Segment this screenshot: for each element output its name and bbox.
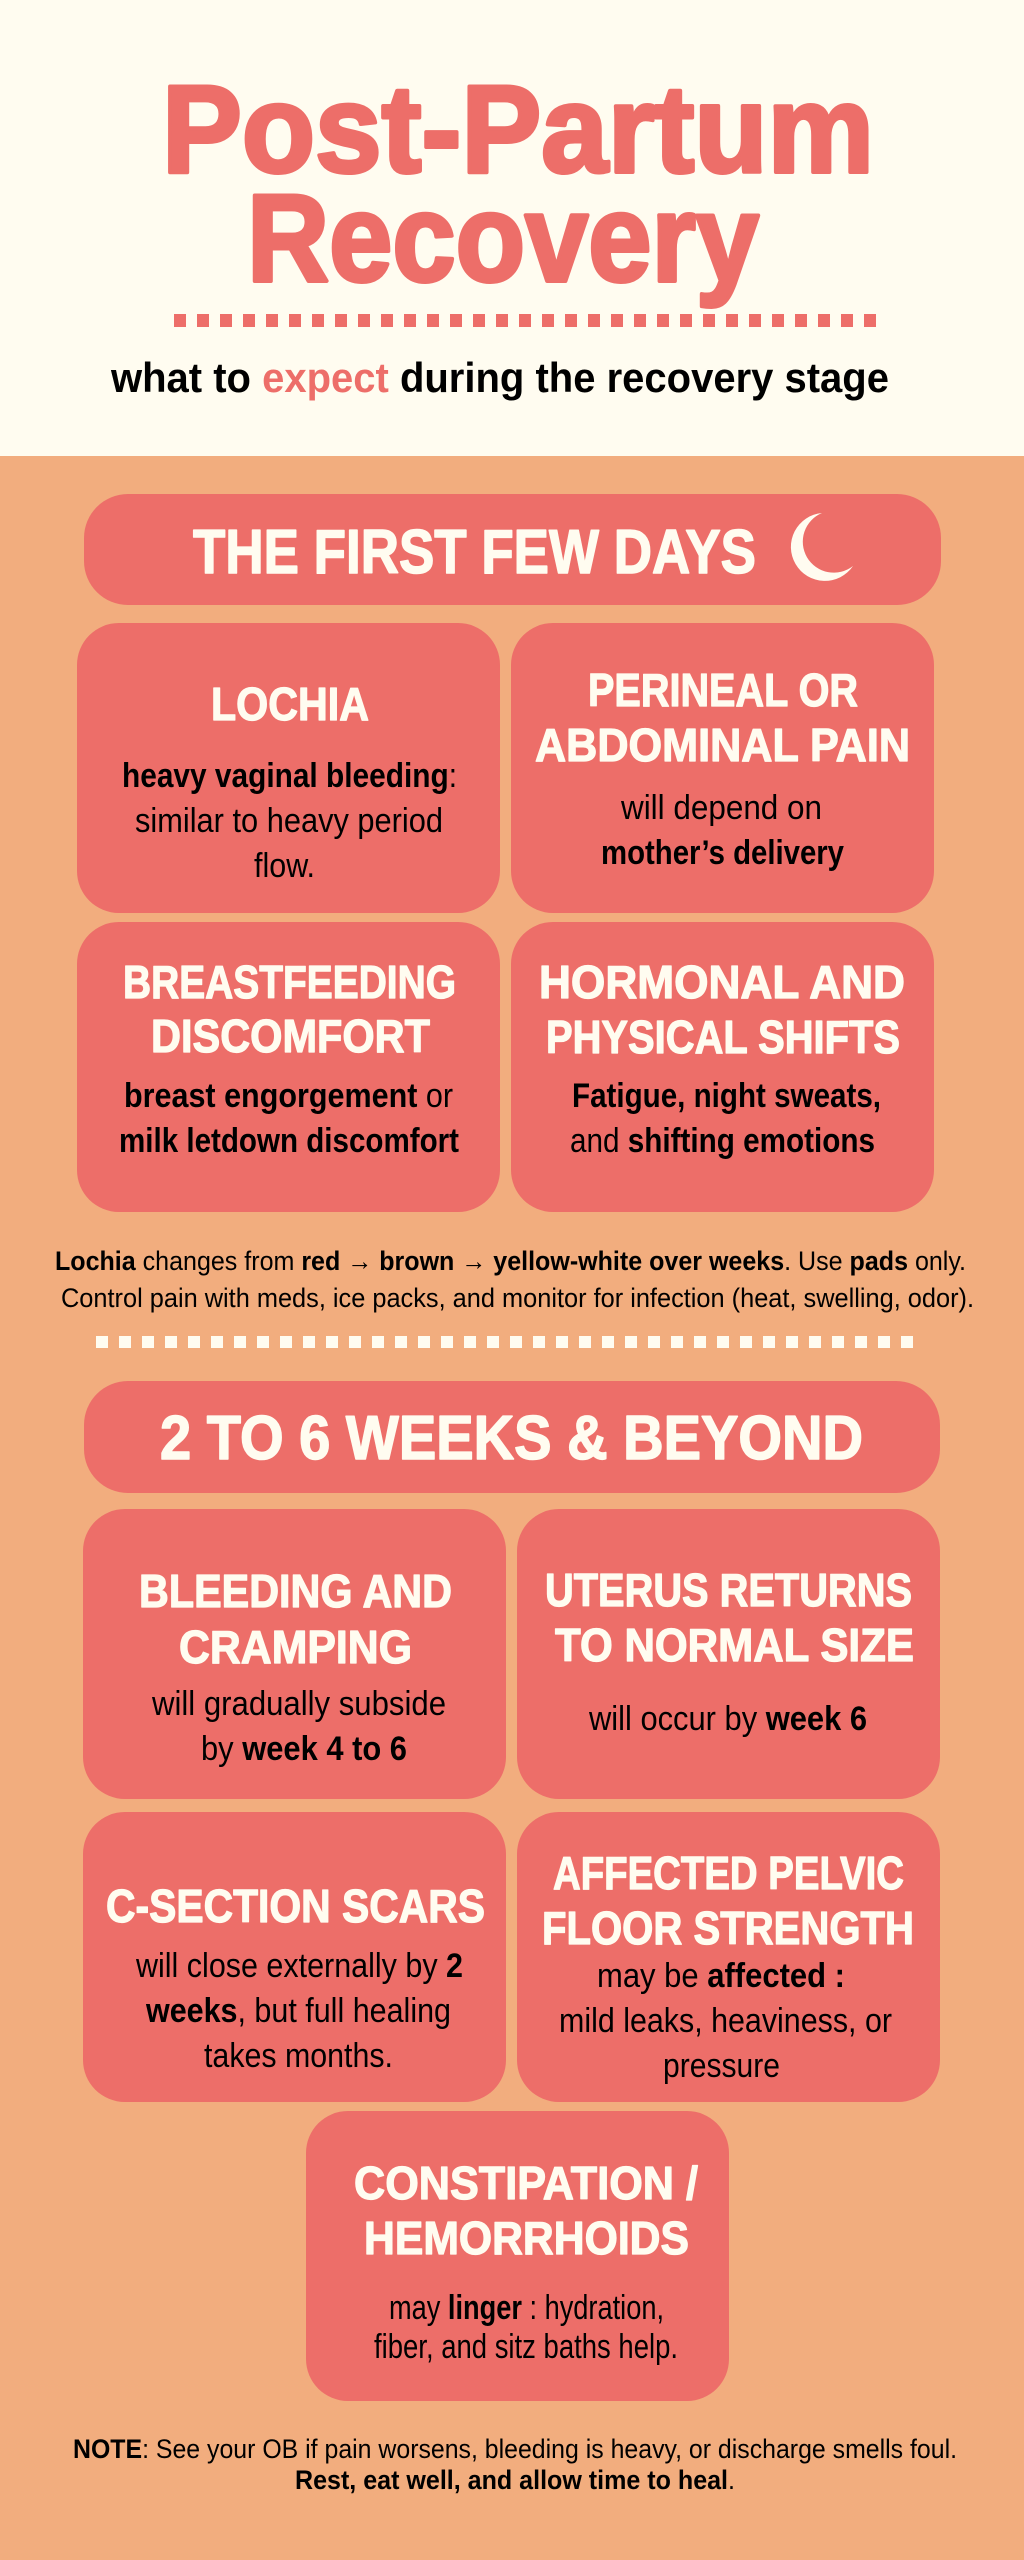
panel: lochia [77,623,500,913]
panel: perineal or abdominal pain: mother’s delivery [601,834,844,872]
panel: affected pelvic floor strength: mild leaks, heaviness, or [559,2002,892,2040]
panel: constipation / hemorrhoids: fiber, and sitz baths help. [374,2328,678,2366]
panel: uterus returns to normal size: UTERUS RETURNS [545,1564,912,1616]
panel: bleeding and cramping: by week 4 to 6 [201,1730,407,1768]
text block: closing note [73,2434,957,2495]
panel: bleeding and cramping [83,1509,506,1799]
panel: c-section scars: takes months. [204,2037,393,2075]
icon: crescent moon [791,513,853,581]
text block: closing note: NOTE: See your OB if pain worsens, bleeding is heavy, or discharge smells foul. [73,2434,957,2464]
panel: breastfeeding discomfort: DISCOMFORT [151,1010,430,1062]
panel: lochia: heavy vaginal bleeding: [122,757,457,795]
panel: c-section scars: weeks, but full healing [145,1992,451,2030]
panel: c-section scars: C-SECTION SCARS [106,1880,485,1932]
title [162,61,874,308]
panel: bleeding and cramping: CRAMPING [179,1621,412,1673]
panel: affected pelvic floor strength: pressure [663,2047,780,2085]
panel: lochia: flow. [254,847,315,885]
panel: lochia: LOCHIA [211,678,369,730]
section heading: the first few days [84,494,941,605]
section heading: the first few days: THE FIRST FEW DAYS [193,518,756,587]
panel: affected pelvic floor strength: may be affected : [597,1957,845,1995]
panel: breastfeeding discomfort [77,922,500,1212]
subtitle: what to expect during the recovery stage [110,354,889,401]
title: Post-Partum [162,61,874,199]
panel: breastfeeding discomfort: BREASTFEEDING [123,956,456,1008]
section heading: 2 to 6 weeks and beyond: 2 TO 6 WEEKS & BEYOND [160,1404,863,1473]
panel: affected pelvic floor strength [517,1812,940,2102]
text block: closing note: Rest, eat well, and allow time to heal. [295,2465,735,2495]
panel: hormonal and physical shifts [511,922,934,1212]
panel: affected pelvic floor strength: AFFECTED PELVIC [553,1847,904,1899]
title: Recovery [247,170,759,308]
panel: bleeding and cramping: BLEEDING AND [139,1565,452,1617]
panel: hormonal and physical shifts: Fatigue, night sweats, [572,1077,881,1115]
panel: uterus returns to normal size [517,1509,940,1799]
panel: hormonal and physical shifts: HORMONAL AND [539,956,905,1008]
panel: perineal or abdominal pain [511,623,934,913]
panel: uterus returns to normal size: TO NORMAL SIZE [555,1619,914,1671]
panel: constipation / hemorrhoids [306,2111,729,2401]
panel: breastfeeding discomfort: breast engorgement or [124,1077,453,1115]
panel: c-section scars: will close externally by 2 [135,1947,463,1985]
panel: constipation / hemorrhoids: may linger : hydration, [389,2289,664,2327]
panel: uterus returns to normal size: will occur by week 6 [588,1700,867,1738]
panel: perineal or abdominal pain: ABDOMINAL PAIN [535,719,910,771]
panel: breastfeeding discomfort: milk letdown discomfort [119,1122,459,1160]
panel: bleeding and cramping: will gradually subside [151,1685,446,1723]
panel: constipation / hemorrhoids: HEMORRHOIDS [364,2212,689,2264]
panel: constipation / hemorrhoids: CONSTIPATION / [354,2157,698,2209]
panel: perineal or abdominal pain: will depend on [620,789,822,827]
header panel [0,0,1024,456]
panel: perineal or abdominal pain: PERINEAL OR [588,664,858,716]
section heading: 2 to 6 weeks and beyond [84,1381,940,1493]
text block: lochia note: Lochia changes from red → brown → yellow-white over weeks. Use pads only. [55,1246,966,1276]
text block: lochia note [55,1246,974,1313]
panel: hormonal and physical shifts: PHYSICAL SHIFTS [546,1011,900,1063]
panel: affected pelvic floor strength: FLOOR STRENGTH [542,1902,914,1954]
panel: c-section scars [83,1812,506,2102]
panel: lochia: similar to heavy period [135,802,443,840]
panel: hormonal and physical shifts: and shifting emotions [570,1122,875,1160]
text block: lochia note: Control pain with meds, ice packs, and monitor for infection (heat, swelling, odor). [61,1283,974,1313]
